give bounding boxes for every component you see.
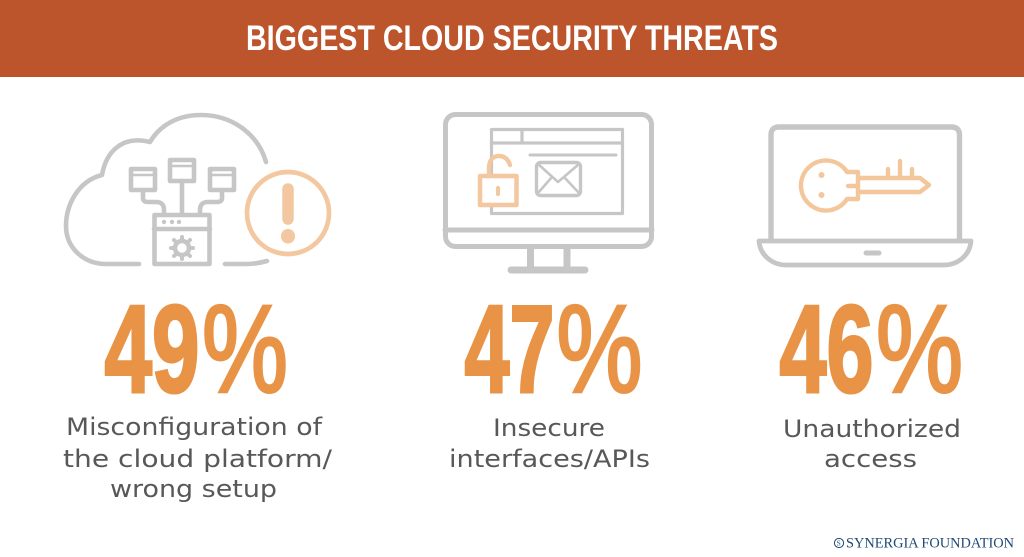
panel: insecure interfaces bbox=[445, 114, 652, 473]
caption: wrong setup bbox=[110, 475, 277, 503]
value: 46%: 46 bbox=[780, 281, 874, 419]
footer credit: S bbox=[837, 539, 841, 548]
caption: Insecure bbox=[493, 414, 605, 442]
caption bbox=[783, 415, 961, 473]
caption: the cloud platform/ bbox=[63, 445, 333, 473]
title: BIGGEST CLOUD SECURITY THREATS bbox=[246, 19, 778, 58]
caption: access bbox=[824, 445, 917, 473]
footer credit: SYNERGIA FOUNDATION bbox=[846, 536, 1015, 552]
window dots bbox=[162, 220, 181, 224]
value: 46%: % bbox=[876, 281, 963, 419]
caption: Unauthorized bbox=[783, 415, 961, 443]
warning circle bbox=[247, 172, 329, 254]
panel: unauthorized access bbox=[759, 127, 971, 473]
caption: interfaces/APIs bbox=[449, 445, 650, 473]
icon: cloud with warning bbox=[66, 115, 329, 264]
value: 49%: 49 bbox=[104, 281, 200, 419]
gear bbox=[171, 237, 193, 259]
title banner bbox=[0, 0, 1024, 77]
panel: misconfiguration bbox=[63, 115, 333, 503]
value: 47%: 47 bbox=[464, 281, 554, 419]
caption bbox=[63, 413, 333, 503]
value: 47%: % bbox=[556, 281, 642, 419]
icon: laptop with key bbox=[759, 127, 971, 265]
caption bbox=[449, 414, 650, 473]
value: 49%: % bbox=[202, 281, 288, 419]
caption: Misconfiguration of bbox=[66, 413, 323, 441]
icon: monitor with lock and envelope bbox=[445, 114, 652, 270]
